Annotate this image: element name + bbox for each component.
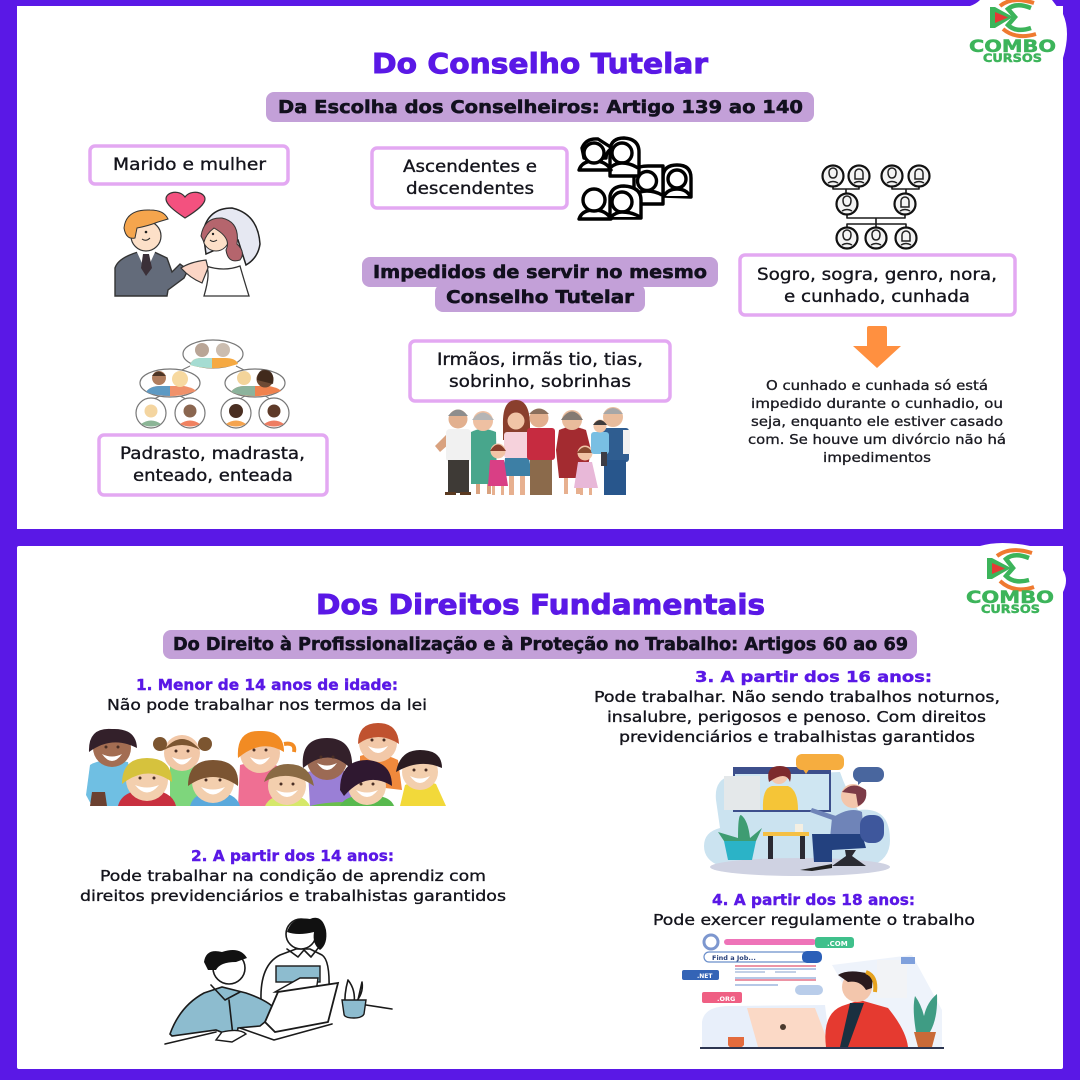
- girl pink: [488, 444, 508, 495]
- icon: family tree black: [822, 166, 930, 248]
- note: cunhado e cunhada: [748, 379, 1006, 466]
- girl light pink: [574, 446, 598, 495]
- illustration: job search: .COM: [827, 940, 848, 948]
- arrow: down: [853, 326, 901, 368]
- illustration: job search: .ORG: [717, 995, 735, 1003]
- mother: [503, 400, 532, 495]
- box: Ascendentes e descendentes: Ascendentes e: [403, 157, 537, 177]
- aunt dark red: [556, 410, 591, 494]
- logo: Combo Cursos bottom: COMBO: [966, 588, 1054, 608]
- title: Dos Direitos Fundamentais: [316, 588, 765, 621]
- box: Ascendentes e descendentes: [372, 148, 567, 208]
- note: cunhado e cunhada: impedimentos: [823, 451, 931, 466]
- icon: colorful family tree: [136, 340, 289, 428]
- subheading pill: [266, 92, 814, 122]
- icon: extended family: [435, 400, 630, 495]
- logo: Combo Cursos top: CURSOS: [983, 51, 1042, 65]
- box: Irmãos, irmãs: sobrinho, sobrinhas: [449, 372, 631, 392]
- text: item 4: 4. A partir dos 18 anos:: [712, 891, 915, 909]
- box: Marido e mulher: [90, 146, 288, 184]
- panel: Do Conselho Tutelar: [17, 0, 1067, 529]
- logo: Combo Cursos bottom: [966, 543, 1066, 616]
- subheading pill: Da Escolha dos Conselheiros: Artigo 139 ao 140: [278, 97, 803, 118]
- box: Irmãos, irmãs: [410, 341, 670, 401]
- logo: Combo Cursos bottom: CURSOS: [981, 602, 1040, 616]
- grandfather left: [435, 410, 471, 495]
- text: item 3: 3. A partir dos 16 anos:: [695, 668, 932, 686]
- note: cunhado e cunhada: com. Se houve um divórcio não há: [748, 433, 1006, 448]
- text: item 2: 2. A partir dos 14 anos:: [191, 847, 394, 865]
- text: item 2: Pode trabalhar na condição de aprendiz com: [100, 867, 486, 885]
- text: item 3: previdenciários e trabalhistas garantidos: [619, 728, 975, 746]
- illustration: video call: [704, 754, 890, 876]
- grandmother: [471, 411, 497, 494]
- text: item 2: [80, 847, 506, 905]
- note: cunhado e cunhada: impedido durante o cunhadio, ou: [751, 397, 1003, 412]
- box: Marido e mulher: Marido e mulher: [113, 155, 266, 175]
- box: Padrasto, madrasta: enteado, enteada: [133, 466, 293, 486]
- grandfather right with boy: [591, 407, 630, 495]
- title: Do Conselho Tutelar: [372, 47, 708, 80]
- panel: Dos Direitos Fundamentais: [17, 543, 1066, 1069]
- logo: Combo Cursos top: [969, 0, 1067, 66]
- text: item 4: [653, 891, 975, 929]
- illustration: job search: Find a Job...: [712, 954, 756, 962]
- illustration: job search: .NET: [697, 973, 713, 980]
- box: Padrasto, madrasta: Padrasto, madrasta,: [120, 444, 305, 464]
- text: item 1: Não pode trabalhar nos termos da lei: [107, 696, 427, 714]
- icon: wedding couple: [115, 192, 260, 296]
- box: Sogro, sogra: [740, 255, 1015, 315]
- text: item 2: direitos previdenciários e trabalhistas garantidos: [80, 887, 506, 905]
- heading: Impedidos de servir: Impedidos de servir no mesmo: [373, 262, 707, 283]
- box: Ascendentes e descendentes: descendentes: [406, 179, 534, 199]
- text: item 3: Pode trabalhar. Não sendo trabalhos noturnos,: [594, 688, 1000, 706]
- text: item 1: 1. Menor de 14 anos de idade:: [136, 676, 398, 694]
- box: Padrasto, madrasta: [99, 435, 327, 495]
- heading: Impedidos de servir: [362, 257, 718, 312]
- text: item 4: Pode exercer regulamente o trabalho: [653, 911, 975, 929]
- illustration: job search: [682, 935, 944, 1049]
- illustration: children: [86, 723, 446, 806]
- text: item 3: [594, 668, 1000, 746]
- icon: people group: [579, 138, 691, 219]
- illustration: student and mentor: [165, 918, 392, 1044]
- logo: Combo Cursos top: COMBO: [969, 37, 1056, 57]
- note: cunhado e cunhada: seja, enquanto ele estiver casado: [751, 415, 1003, 430]
- heading: Impedidos de servir: Conselho Tutelar: [446, 287, 634, 308]
- text: item 1: [107, 676, 427, 714]
- text: item 3: insalubre, perigosos e penoso. Com direitos: [607, 708, 986, 726]
- father red: [527, 408, 555, 495]
- box: Sogro, sogra: e cunhado, cunhada: [784, 287, 970, 307]
- subheading pill: Do Direito à Profissionalização e à Proteção no Trabalho: Artigos 60 ao 69: [173, 634, 908, 655]
- box: Sogro, sogra: Sogro, sogra, genro, nora,: [757, 265, 997, 285]
- note: cunhado e cunhada: O cunhado e cunhada só está: [766, 379, 988, 394]
- box: Irmãos, irmãs: Irmãos, irmãs tio, tias,: [437, 350, 643, 370]
